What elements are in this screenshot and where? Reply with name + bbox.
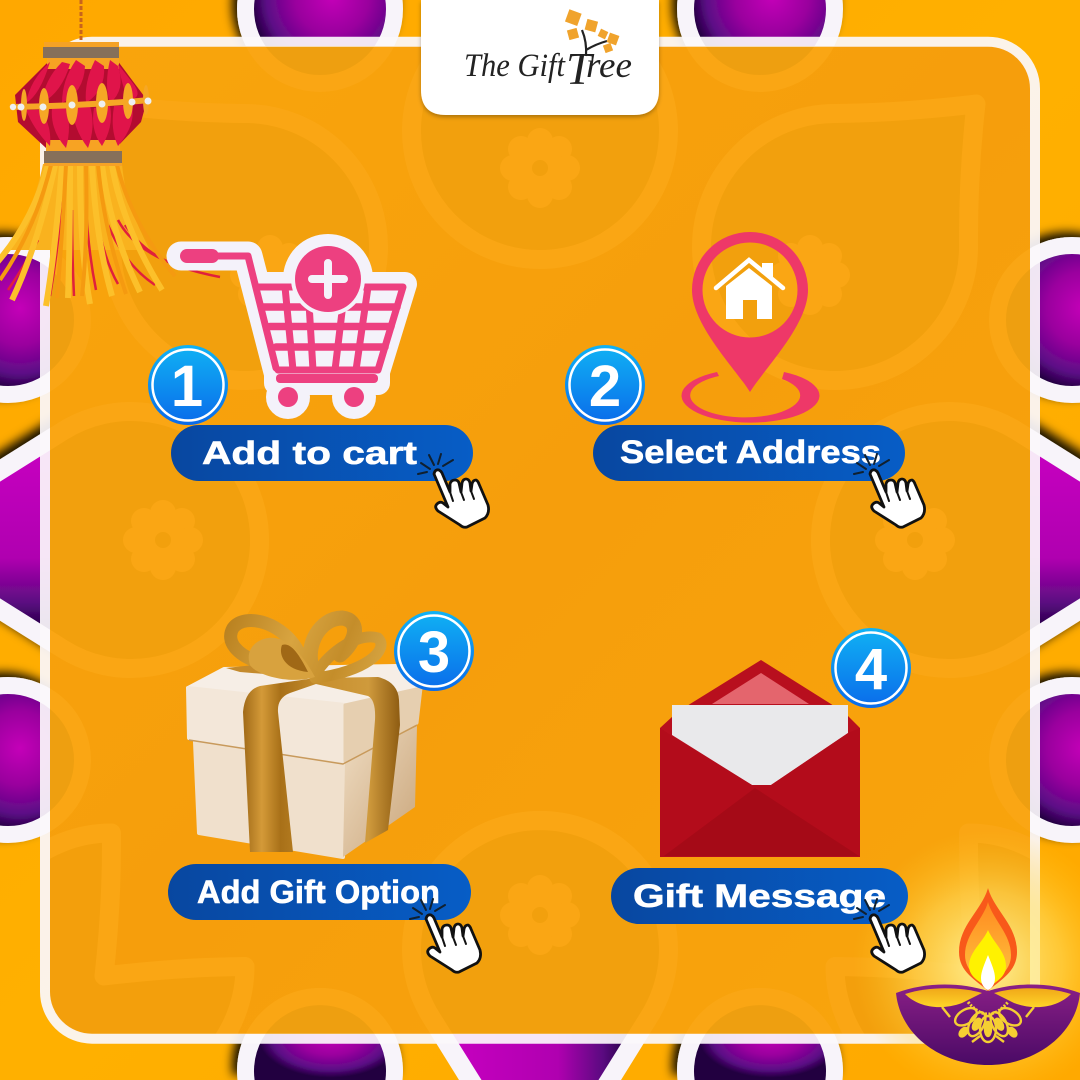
step 3: add gift option: [168, 611, 481, 972]
lantern body: [15, 60, 147, 148]
step badge 4: 4: [855, 637, 887, 702]
button: Gift Message: Gift Message: [633, 878, 886, 914]
step badge 1: [148, 345, 228, 425]
icon: red envelope with note: [660, 660, 860, 857]
logo: The Gift Tree: ree: [586, 45, 632, 85]
icon: pointer hand: [410, 899, 481, 972]
step badge 2: [565, 345, 645, 425]
diya glow: [853, 830, 1080, 1080]
icon: pointer hand: [854, 454, 925, 527]
icon: shopping cart: [181, 242, 405, 407]
step badge 1: 1: [171, 354, 203, 419]
icon: location pin with house: [682, 232, 820, 423]
step 1: add to cart: [148, 242, 489, 527]
button: Gift Message: [611, 868, 908, 924]
button: Add to cart: Add to cart: [202, 435, 417, 471]
button: Select Address: Select Address: [620, 434, 881, 470]
button: Select Address: [593, 425, 905, 481]
icon: pointer hand: [418, 454, 489, 527]
icon: gift box with gold bow: [188, 618, 421, 857]
step 2: select address: [565, 232, 925, 527]
button: Add Gift Option: [168, 864, 471, 920]
lantern fringe: [0, 164, 220, 306]
step badge 3: 3: [418, 620, 450, 685]
diya mandala ornament: [942, 1002, 1034, 1042]
decoration: lit diya lamp: [896, 888, 1080, 1065]
step badge 4: [831, 628, 911, 708]
logo: The Gift Tree: T: [566, 43, 595, 94]
button: Add to cart: [171, 425, 473, 481]
logo: The Gift Tree: [421, 0, 659, 115]
decoration: hanging paper lantern: [0, 0, 220, 306]
icon: pointer hand: [854, 899, 925, 972]
logo: The Gift Tree: The Gift: [464, 48, 566, 84]
step 4: gift message: [611, 628, 925, 972]
button: Add Gift Option: Add Gift Option: [197, 874, 440, 910]
step badge 2: 2: [589, 354, 621, 419]
step badge 3: [394, 611, 474, 691]
